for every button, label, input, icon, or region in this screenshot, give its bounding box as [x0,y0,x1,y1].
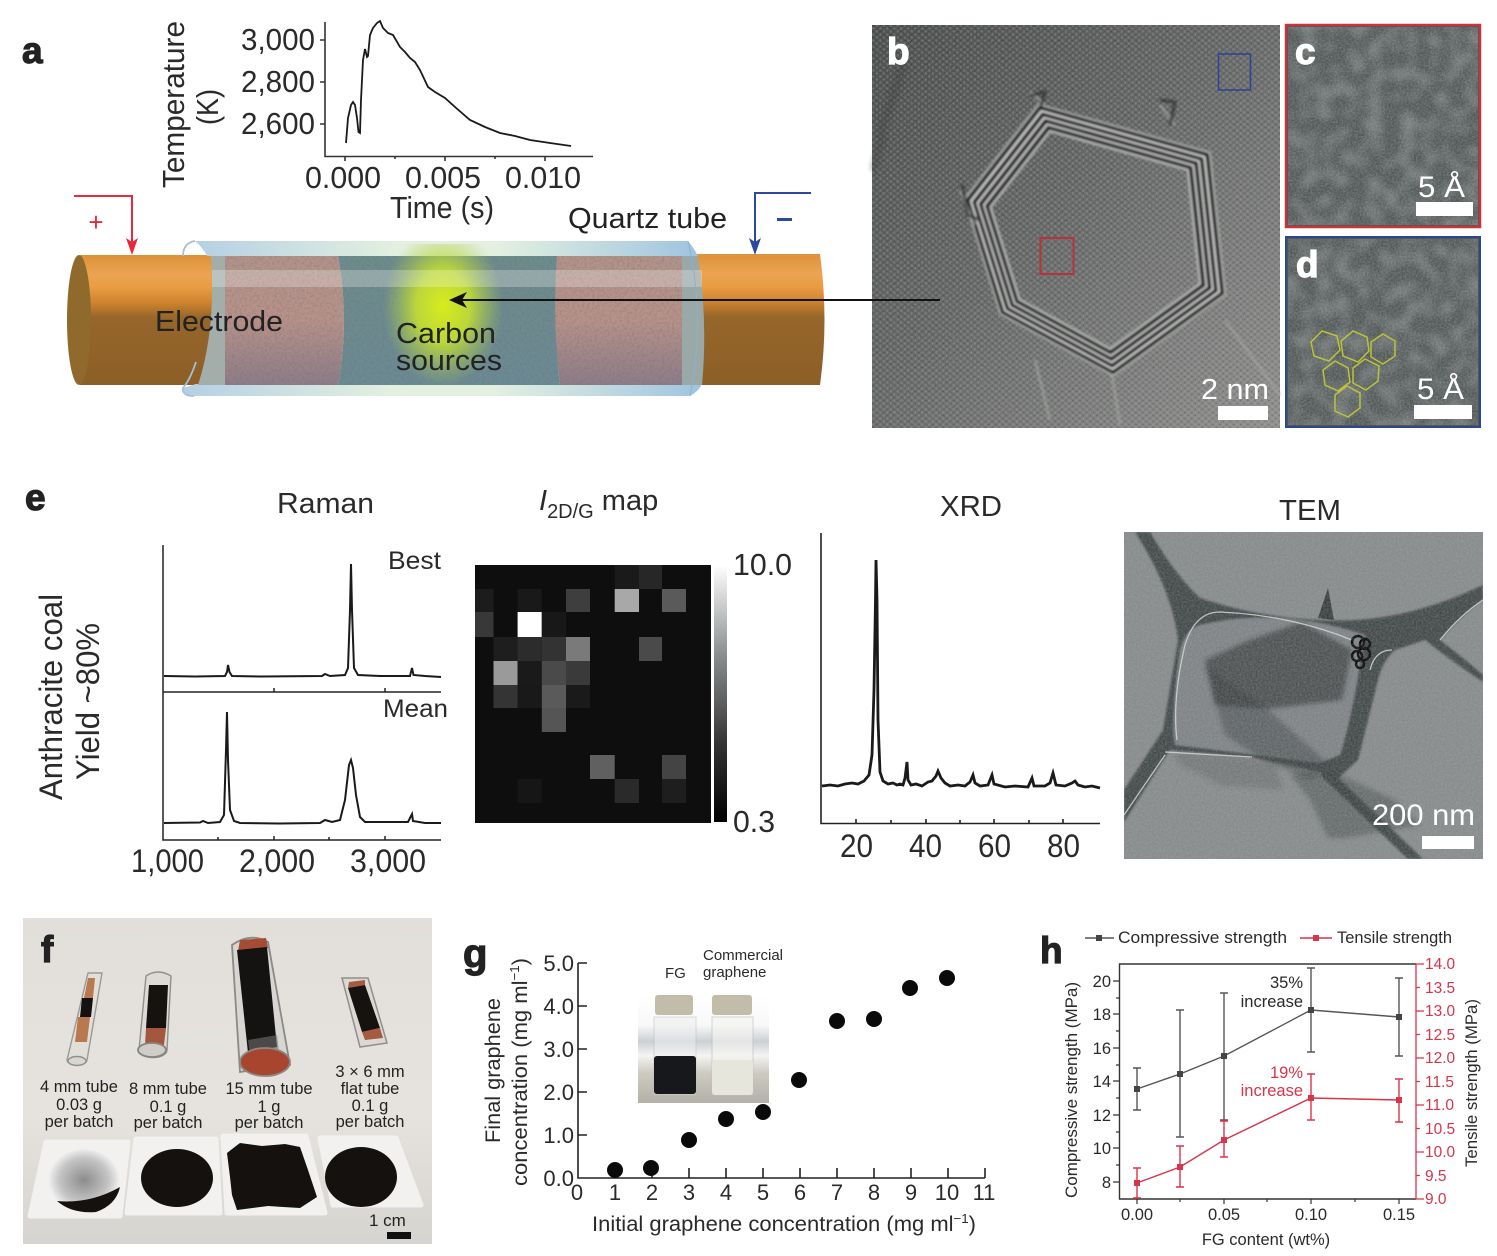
XRD heading: XRD [940,491,1002,523]
x tick labels: 10 [935,1180,959,1205]
temperature axis labels: 3,000 [241,22,315,57]
x tick labels: 5 [757,1180,769,1205]
x tick labels: 11 [973,1180,995,1205]
label 4 mm: per batch [45,1113,113,1131]
tube highlight band [212,270,702,287]
right rim edge [688,241,698,396]
x tick labels: 0.00 [1121,1206,1153,1224]
x tick labels: 9 [905,1180,917,1205]
upper flake [1205,622,1352,709]
label flat tube: 3 × 6 mm [335,1063,405,1081]
x axis title: Initial graphene concentration (mg ml [592,1212,946,1236]
inner tube texture [225,256,682,385]
label: quartz tube: Quartz tube [568,203,727,235]
XRD trace [822,560,1100,788]
tick 14: 14 [1093,1073,1111,1091]
annotation 35% increase: 35% [1270,974,1303,992]
positive terminal [74,196,138,255]
right ticks: 14.0 [1425,956,1456,973]
x tick labels: 0 [571,1180,583,1205]
powder 1 black base [57,1187,120,1212]
x tick labels: 6 [794,1180,806,1205]
right tick labels: 11.5 [1425,1074,1454,1091]
scale label: 5 Å [1418,171,1465,204]
trays [30,1136,421,1216]
lower diagonal strand [1320,770,1423,859]
tray 1 [30,1142,128,1216]
shell halo [965,105,1225,375]
tick 1000: 1,000 [131,843,204,879]
tensile markers [1134,1095,1402,1186]
map heading: I [539,485,547,517]
hexagons [1311,331,1395,417]
tensile legend text: Tensile strength [1337,929,1452,947]
glass [67,973,102,1065]
tick 80: 80 [1047,828,1080,864]
temperature axis labels: Time (s) [390,190,494,225]
glass [232,938,290,1072]
left streak [872,60,905,170]
temperature axis labels: 2,600 [241,106,315,141]
red selection box [1040,238,1074,274]
lower flake [1290,770,1420,838]
FG vial glass [654,1017,696,1095]
temperature axis labels: (K) [190,89,225,125]
end ring [68,1056,86,1066]
panel g: graphene concentration scatter plot [463,932,995,1236]
Raman axes [163,545,441,840]
compressive series [1133,968,1403,1137]
top copper [238,938,268,951]
scale label: 200 nm [1372,799,1475,832]
powder 3 [227,1143,317,1210]
lower copper [75,1017,90,1042]
tube 2: 8 mm [138,972,171,1058]
panel letter e: e [25,477,46,518]
temperature axes [320,22,593,161]
Raman heading: Raman [277,488,374,520]
y axis title line 2: ) [508,958,532,965]
XRD axes [821,533,1100,824]
upper copper [84,978,95,998]
glass [342,978,387,1047]
right tick labels [1425,956,1456,1208]
y axis title line 1: Final graphene [481,998,505,1143]
inset label commercial graphene: Commercial [703,947,783,964]
row 0 cells [615,565,639,589]
positive arrow head [126,238,138,255]
y axis title line 2: −1 [507,965,522,981]
Mean label: Mean [383,695,448,723]
connector arrow to carbon sources [462,299,940,301]
dark particle cluster [1352,636,1370,668]
panel d background [1286,237,1480,427]
panel e: anthracite coal characterisation [25,477,1483,879]
Mean spectrum [164,712,441,824]
panel c: atomic resolution image [1286,25,1480,227]
tick 12: 12 [1093,1107,1111,1125]
x tick labels: 3 [683,1180,695,1205]
left axis title: Compressive strength (MPa) [1063,982,1081,1198]
carbon [146,985,168,1028]
TEM image [1124,495,1483,859]
TEM heading: TEM [1279,495,1341,527]
commercial vial glass [712,1017,753,1095]
right axis title: Tensile strength (MPa) [1463,999,1481,1167]
compressive error bars [1133,968,1403,1137]
tube 4: flat tube [342,978,387,1047]
Best label: Best [388,547,441,575]
colour bar [714,565,727,822]
graphene powders [49,1143,397,1212]
scale label 2 nm: 2 nm [1201,374,1269,406]
temperature axis labels: 2,800 [241,64,315,99]
copper [145,1028,166,1045]
right tick labels: 9.0 [1425,1191,1447,1208]
x tick labels: 0.10 [1295,1206,1327,1224]
lacey carbon web [1124,532,1483,859]
central carbon section [338,256,562,385]
Raman chart [131,488,448,879]
x tick labels: 0.05 [1208,1206,1240,1224]
quartz tube with electrodes and carbon source [67,240,824,397]
temperature axis labels: 0.005 [405,160,481,195]
panel letter g: g [463,932,487,976]
scale bar [387,1232,411,1239]
main web [1124,532,1483,822]
compressive legend text: Compressive strength [1118,929,1287,947]
scale bar [1422,836,1474,849]
tick 20: 20 [1093,973,1111,991]
shell 1 [968,108,1222,372]
TEM background [1124,532,1483,859]
map heading: 2D/G [547,501,594,523]
panel b: electron micrograph of graphene ring [462,25,1280,428]
glow ellipse [388,244,499,380]
Best spectrum [164,564,441,677]
label flat tube: flat tube [341,1080,399,1098]
left lower flake [1175,752,1282,789]
tick 16: 16 [1093,1040,1111,1058]
label flat tube: per batch [336,1113,404,1131]
hot spot glow [388,244,499,380]
map cells [475,565,686,803]
I2D/G heat map [475,485,792,839]
inset label commercial graphene: graphene [703,964,766,981]
scale bar [1414,405,1472,419]
powder 4 [325,1147,397,1207]
panel d: atomic resolution image with hexagons [1286,237,1480,427]
tube lower wall [183,384,702,396]
end ring [138,1043,166,1057]
noise texture [872,25,1280,428]
panel c noise [1288,27,1478,225]
compressive markers [1134,1007,1402,1092]
right tick labels: 13.5 [1425,980,1455,997]
powder 1 speckle [49,1149,119,1211]
compressive legend marker [1085,937,1114,939]
scale label: 5 Å [1417,373,1464,406]
blue selection box [1218,54,1250,90]
y tick labels [543,951,574,1191]
panel letter c: c [1295,31,1316,72]
concentric graphene shells [872,60,1280,425]
tick 8: 8 [1102,1174,1111,1192]
right tick labels: 11.0 [1425,1097,1454,1114]
TEM noise [1124,532,1483,859]
panel a: flash joule heating schematic [22,21,824,408]
x tick labels: 8 [868,1180,880,1205]
panel letter f: f [41,929,54,970]
x tick labels: 4 [720,1180,732,1205]
white hole edges [1124,600,1483,815]
x axis title: FG content (wt%) [1202,1231,1330,1249]
tick 18: 18 [1093,1006,1111,1024]
label: carbon sources: Carbon [396,318,496,350]
scale bar [1416,202,1473,216]
tube 3: 15 mm [232,938,290,1076]
panel d noise [1288,239,1478,425]
negative arrow head [749,238,761,255]
compressive line [1137,1010,1399,1089]
scale bar [1218,406,1268,420]
tensile line [1137,1098,1399,1183]
temperature axis labels: 0.010 [505,160,581,195]
annotation 19% increase: 19% [1270,1064,1303,1082]
mid flake [1205,665,1330,780]
left tube rim [183,241,196,396]
map heading: map [594,485,658,517]
axes [578,963,985,1178]
label 8 mm: 8 mm tube [129,1080,207,1098]
tensile legend square [1313,935,1319,941]
x tick labels: 0.15 [1383,1206,1415,1224]
panel d blotches [1288,239,1478,425]
positive wire arrow [74,196,132,245]
tensile legend marker [1300,937,1332,939]
label 15 mm: 15 mm tube [225,1080,313,1098]
carbon [80,998,93,1017]
grey end of tube [248,1035,279,1056]
label 4 mm: 0.03 g [56,1096,102,1114]
bottom copper [240,1048,290,1076]
right copper electrode [680,254,824,385]
inset background [638,995,769,1103]
commercial vial liquid [712,1060,753,1095]
label 4 mm: 4 mm tube [40,1078,118,1096]
tick 5.0: 5.0 [543,951,574,976]
colour bar maximum: 10.0 [733,547,792,582]
row label line 2: Yield ~80% [70,623,106,780]
right tick labels: 12.0 [1425,1050,1456,1067]
panel h: strength vs FG content chart [1040,929,1481,1249]
tick 10: 10 [1093,1140,1111,1158]
particle loops [1352,636,1370,668]
map background [475,565,711,823]
tray 4 [320,1138,421,1205]
tube upper wall [195,241,698,256]
tick 3000: 3,000 [350,843,426,879]
inset chart: temperature versus time [156,21,593,225]
panel letter h: h [1040,930,1063,971]
y axis title line 2: concentration (mg ml [508,985,532,1186]
spike [1318,588,1334,620]
powder 2 [141,1149,213,1207]
panel c blotches [1288,27,1478,225]
lattice texture [872,25,1280,428]
FG vial black liquid [654,1056,696,1094]
label 8 mm: 0.1 g [150,1098,186,1116]
right tick labels: 9.5 [1425,1168,1447,1185]
corner debris [962,92,1175,220]
carbon [237,947,277,1053]
photo background [23,918,432,1244]
left pink electrode section [225,256,344,385]
left electrode end face [67,255,91,385]
x axis title: −1 [954,1211,969,1226]
temperature curve [346,21,571,146]
glass [139,972,171,1058]
panel letter a: a [22,30,43,71]
panel c background [1286,25,1480,227]
tick 60: 60 [978,828,1011,864]
tick 4.0: 4.0 [543,994,574,1019]
x axis title: ) [969,1212,976,1236]
outer flake traces [960,92,1280,425]
tick 20: 20 [840,828,873,864]
tick 1.0: 1.0 [543,1123,574,1148]
tick 0.0: 0.0 [543,1166,574,1191]
yellow hexagon overlay [1311,331,1395,417]
negative wire arrow [755,193,811,245]
XRD chart [821,491,1100,864]
left copper electrode [80,255,226,385]
right axis [1416,964,1424,1199]
label 8 mm: per batch [134,1114,202,1132]
bottom copper [362,1028,383,1040]
x tick labels: 2 [646,1180,658,1205]
colour bar minimum: 0.3 [733,804,775,839]
tensile series [1133,1074,1403,1198]
Raman tick labels [131,843,426,879]
tray 3 [223,1136,325,1213]
left axis ticks [1113,981,1399,1204]
row label line 1: Anthracite coal [33,594,69,800]
right tick labels: 10.0 [1425,1144,1456,1161]
right tick labels: 12.5 [1425,1027,1455,1044]
negative terminal [749,193,811,255]
annotation 19% increase: increase [1241,1082,1303,1100]
tray 2 [127,1139,220,1213]
annotation 35% increase: increase [1241,993,1303,1011]
scale label 1 cm: 1 cm [369,1211,406,1230]
micrograph background [872,25,1280,428]
graphene flakes [1172,622,1420,838]
label: electrode: Electrode [155,306,283,338]
temperature axis labels: 0.000 [305,160,381,195]
right tick labels: 13.0 [1425,1003,1456,1020]
tick 2000: 2,000 [239,843,315,879]
tensile error bars [1133,1074,1403,1198]
tube 1: 4 mm [67,973,102,1066]
plot frame [1120,964,1416,1199]
left tick labels [1093,973,1111,1192]
tick 2.0: 2.0 [543,1080,574,1105]
scatter dots [607,1162,623,1178]
top copper [348,980,365,988]
tick 40: 40 [909,828,942,864]
label 15 mm: per batch [235,1114,303,1132]
FG vial cap [655,995,693,1015]
label 15 mm: 1 g [258,1098,280,1116]
legend [1085,929,1452,947]
heat halo [315,228,565,408]
minus sign [777,218,792,221]
right pink electrode section [555,256,682,385]
panel letter d: d [1296,244,1319,285]
carbon [348,985,380,1032]
tick 3.0: 3.0 [543,1037,574,1062]
right glass band [682,256,704,385]
central hole [1173,617,1365,763]
label flat tube: 0.1 g [352,1097,388,1115]
tube labels [40,1063,405,1132]
commercial vial cap [712,995,752,1015]
arrow head to hot spot [449,292,467,308]
x tick labels: 1 [609,1180,621,1205]
panel f: photo of tubes and graphene yields [23,918,432,1244]
data points [607,970,955,1178]
x tick labels: 7 [831,1180,843,1205]
left glass band [198,256,226,385]
panel letter b: b [887,31,910,72]
inset label FG: FG [665,965,686,982]
XRD tick labels [840,828,1080,864]
TEM content [1124,532,1483,859]
label: carbon sources: sources [396,345,502,377]
inset vial photo [638,995,769,1103]
temperature axis labels [156,21,581,225]
right tick labels: 10.5 [1425,1121,1455,1138]
compressive legend square [1096,935,1102,941]
temperature axis labels: Temperature [156,21,191,188]
plus sign: + [88,207,104,237]
